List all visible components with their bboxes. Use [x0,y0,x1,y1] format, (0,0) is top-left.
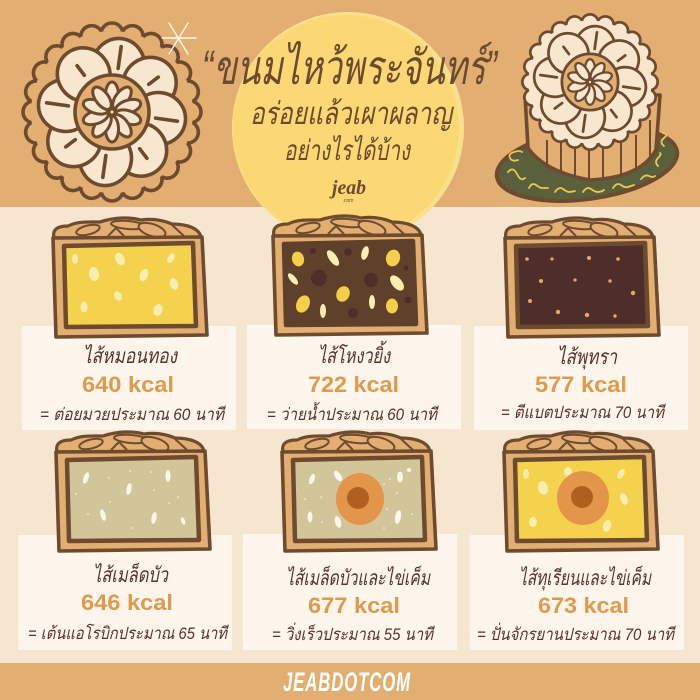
footer brand: JEABDOTCOM [283,667,411,697]
logo: jeab [329,177,366,199]
card 2 name: ไส้โหงวยิ้ง [318,340,391,368]
card 6 name: ไส้ทุเรียนและไข่เค็ม [519,565,652,591]
card 2 exercise: = ว่ายน้ำประมาณ 60 นาที [267,401,440,424]
panel: card 1 [22,326,236,430]
card 5 exercise: = วิ่งเร็วประมาณ 55 นาที [272,622,436,644]
panel: card 4 [18,535,232,650]
panel: card 5 [243,534,457,650]
card 5 name: ไส้เมล็ดบัวและไข่เค็ม [286,565,431,590]
icon: mooncake on plate [492,14,682,211]
cake top [522,14,658,150]
panel: card 6 [470,535,684,650]
card 2 calories: 722 kcal [308,372,399,397]
title: “ขนมไหว้พระจันทร์” [202,40,498,95]
plate pattern [508,133,666,192]
icon: mung bean cake slice [53,218,207,337]
footer [0,663,700,700]
title [202,40,498,166]
icon: mooncake top view [23,23,201,201]
card 3 name: ไส้พุทรา [557,345,618,370]
panel: card 3 [474,326,688,430]
icon: five-nut cake slice [273,216,427,335]
plate [492,117,682,211]
content background [0,207,700,663]
yellow title circle [232,12,464,244]
card 3 calories: 577 kcal [535,372,627,397]
card 1 exercise: = ต่อยมวยประมาณ 60 นาที [40,405,227,424]
icon: lotus seed and salted egg cake slice [282,432,436,551]
icon: lotus seed cake slice [56,432,210,551]
cake side ridges [547,120,650,179]
header background [0,0,700,207]
card 5 calories: 677 kcal [308,593,400,618]
icon: jujube cake slice [505,218,659,337]
card 1 calories: 640 kcal [82,372,174,397]
card 3 exercise: = ตีแบตประมาณ 70 นาที [501,403,667,422]
card 6 exercise: = ปั่นจักรยานประมาณ 70 นาที [477,622,677,644]
panel: card 2 [247,325,461,429]
title: อร่อยแล้วเผาผลาญ [250,96,454,132]
card 4 calories: 646 kcal [81,590,173,615]
card 1 name: ไส้หมอนทอง [83,344,178,368]
logo: .com [343,198,353,204]
cake side [525,95,660,180]
title: อย่างไรได้บ้าง [284,134,412,166]
card 6 calories: 673 kcal [538,593,629,618]
icon: sparkle [162,23,196,54]
card 4 exercise: = เต้นแอโรบิกประมาณ 65 นาที [28,623,230,643]
icon: durian and salted egg cake slice [504,432,658,551]
card 4 name: ไส้เมล็ดบัว [93,562,169,587]
